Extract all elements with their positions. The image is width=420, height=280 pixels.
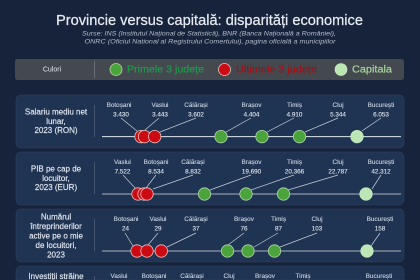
sources bbox=[82, 30, 337, 46]
panel: intreprinderi: 24 bbox=[122, 226, 129, 232]
panel: PIB: PIB pe cap de bbox=[31, 164, 82, 174]
panel: salariu: Călărași bbox=[184, 102, 208, 109]
legend bbox=[15, 59, 404, 80]
panel: intreprinderi: Numărul bbox=[41, 212, 71, 222]
panel: PIB: 7.522 bbox=[115, 168, 131, 176]
panel: PIB: Cluj bbox=[332, 159, 344, 166]
panel: salariu: 4.404 bbox=[244, 112, 260, 118]
panel: PIB: Botoșani bbox=[144, 159, 168, 166]
panel: intreprinderi: Cluj bbox=[311, 216, 323, 223]
panel: intreprinderi: Vaslui bbox=[150, 216, 166, 223]
panel: investitii: București bbox=[366, 273, 392, 280]
panel: salariu: Timiș bbox=[287, 102, 302, 109]
legend: Culori bbox=[43, 66, 62, 74]
panel: intreprinderi: Timiș bbox=[271, 216, 286, 223]
panel: investitii: Brașov bbox=[255, 273, 276, 280]
panel: investitii: Vaslui bbox=[111, 273, 127, 280]
panel: intreprinderi: 29 bbox=[154, 226, 162, 232]
panel: intreprinderi: Călărași bbox=[184, 216, 208, 223]
panel: PIB: Vaslui bbox=[114, 159, 131, 166]
panel: PIB: 42.312 bbox=[371, 168, 391, 176]
panel: intreprinderi: Brașov bbox=[234, 216, 255, 223]
panel: investitii: Călărași bbox=[180, 273, 204, 280]
panel: salariu: 3.602 bbox=[188, 112, 204, 118]
panel: investitii: Timiș bbox=[295, 273, 311, 280]
panel: intreprinderi: 37 bbox=[192, 226, 200, 232]
panel: intreprinderi: București bbox=[367, 216, 393, 223]
panel: intreprinderi: Botoșani bbox=[114, 216, 138, 223]
panel: intreprinderi: de locuitori, bbox=[36, 241, 76, 250]
panel: salariu: 5.344 bbox=[330, 112, 346, 118]
panel: PIB: 20.366 bbox=[285, 168, 305, 176]
panel: PIB: București bbox=[368, 159, 394, 166]
panel: salariu: 3.430 bbox=[113, 112, 129, 118]
panel: PIB: Timiș bbox=[287, 159, 302, 166]
panel: intreprinderi: 87 bbox=[275, 226, 282, 232]
panel: salariu: Brașov bbox=[242, 102, 262, 109]
panel: intreprinderi: 103 bbox=[312, 226, 323, 232]
panel: salariu bbox=[16, 95, 404, 148]
panel: salariu: Cluj bbox=[332, 102, 344, 109]
panel: salariu: Vaslui bbox=[152, 102, 168, 109]
panel: PIB: 19.690 bbox=[242, 168, 262, 176]
panel: intreprinderi: 2023 bbox=[47, 250, 65, 260]
panel: salariu: 2023 (RON) bbox=[34, 126, 78, 135]
legend: Capitala bbox=[352, 65, 392, 76]
legend: Ultimele 3 județe bbox=[236, 65, 317, 76]
sources: Surse: INS (Institutul Național de Statistică), BNR (Banca Națională a României), bbox=[82, 30, 336, 38]
panel: PIB: Brașov bbox=[242, 159, 262, 166]
panel: salariu: lunar, bbox=[46, 117, 66, 126]
panel: salariu: Salariu mediu net bbox=[25, 108, 88, 116]
panel: PIB: 2023 (EUR) bbox=[35, 183, 77, 192]
panel: intreprinderi: 76 bbox=[240, 226, 248, 232]
panel: PIB: 22.787 bbox=[328, 168, 348, 176]
sources: ONRC (Oficiul National al Registrului Comertului), pagina oficială a municipiilor bbox=[84, 38, 337, 46]
panel: salariu: București bbox=[368, 102, 394, 109]
panel: salariu: Botoșani bbox=[107, 102, 131, 109]
panel: investitii bbox=[16, 266, 404, 280]
panel: PIB: 8.832 bbox=[185, 168, 201, 176]
panel: intreprinderi: 158 bbox=[375, 226, 386, 232]
panel: salariu: 4.910 bbox=[287, 112, 303, 118]
panel: salariu: 6.053 bbox=[373, 112, 389, 118]
panel: investitii: Cluj bbox=[223, 273, 235, 280]
panel: PIB: 8.534 bbox=[148, 168, 164, 176]
legend: Primele 3 județe bbox=[127, 65, 204, 76]
panel: intreprinderi: active pe o mie bbox=[29, 232, 83, 240]
panel: intreprinderi bbox=[16, 209, 404, 262]
panel: PIB: Călărași bbox=[181, 159, 205, 166]
panel: PIB bbox=[16, 152, 404, 205]
panel: PIB: locuitor, bbox=[42, 174, 70, 183]
panel: salariu: 3.443 bbox=[152, 112, 168, 118]
panel: investitii: Botoșani bbox=[142, 273, 166, 280]
panel: intreprinderi: întreprinderilor bbox=[29, 222, 82, 231]
title: Provincie versus capitală: disparități economice bbox=[56, 13, 363, 29]
